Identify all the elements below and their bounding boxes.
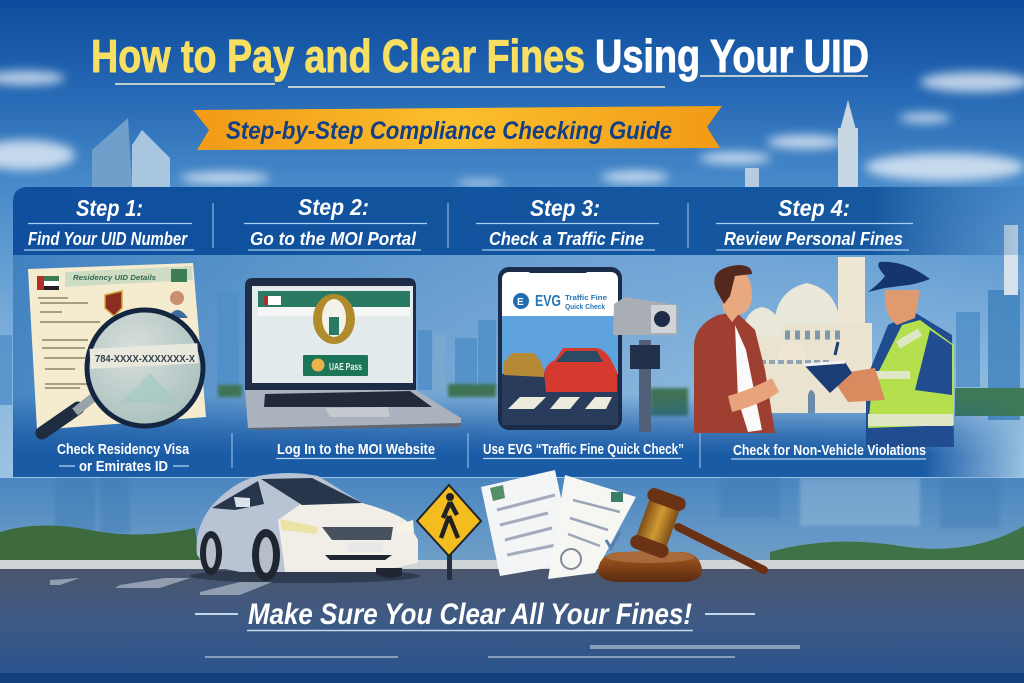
step 4 heading: Step 4: xyxy=(778,195,850,221)
step 3 caption: Use EVG “Traffic Fine Quick Check” xyxy=(483,441,684,458)
UAE Pass button xyxy=(303,355,368,376)
icon: magnifying glass xyxy=(42,310,203,433)
step 3 heading: Step 3: xyxy=(530,195,600,221)
step 2 heading: Go to the MOI Portal xyxy=(250,228,417,249)
step 1 heading xyxy=(24,195,194,250)
icon: magnifying glass: 784-XXXX-XXXXXXX-X xyxy=(95,353,195,365)
step 2 heading: Step 2: xyxy=(298,194,369,220)
step 4 heading xyxy=(716,195,913,250)
step 1 xyxy=(24,195,206,475)
icon: fine documents xyxy=(481,470,636,579)
step 1 caption xyxy=(57,441,190,475)
icon: traffic camera xyxy=(613,297,677,432)
icon: phone with EVG app: Traffic Fine xyxy=(565,293,607,302)
step 2 xyxy=(244,194,461,458)
step 1 heading: Find Your UID Number xyxy=(28,228,188,249)
step 3 xyxy=(476,195,684,458)
icon: phone with EVG app xyxy=(498,267,622,430)
icon: residency document xyxy=(28,263,206,430)
icon: phone with EVG app: Quick Check xyxy=(565,302,606,311)
icon: pedestrian crossing sign xyxy=(417,485,481,580)
subtitle ribbon xyxy=(193,106,722,150)
step 1 heading: Step 1: xyxy=(76,195,143,221)
header band xyxy=(13,187,1024,255)
step 4 caption: Check for Non-Vehicle Violations xyxy=(733,442,926,459)
icon: judge gavel xyxy=(598,486,764,582)
step 3 heading xyxy=(476,195,659,250)
icon: red car xyxy=(544,348,617,392)
icon: orange car xyxy=(504,353,544,377)
main steps panel xyxy=(0,187,1024,477)
title: Using Your UID xyxy=(595,30,869,82)
subtitle ribbon: Step-by-Step Compliance Checking Guide xyxy=(226,117,672,145)
step 4 heading: Review Personal Fines xyxy=(724,228,903,249)
icon: mosque xyxy=(742,257,872,413)
step 2 caption: Log In to the MOI Website xyxy=(277,441,435,458)
icon: police officer xyxy=(804,262,954,447)
step 3 heading: Check a Traffic Fine xyxy=(489,228,644,249)
icon: phone with EVG app: EVG xyxy=(535,293,561,310)
step 1 caption: or Emirates ID xyxy=(79,458,168,475)
icon: residency document: Residency UID Details xyxy=(73,275,156,282)
icon: man in red shirt xyxy=(694,265,779,433)
closing message: Make Sure You Clear All Your Fines! xyxy=(248,598,692,631)
icon: laptop with MOI portal xyxy=(245,278,461,430)
title: How to Pay and Clear Fines xyxy=(91,30,585,82)
step 4 xyxy=(694,195,954,459)
UAE Pass button: UAE Pass xyxy=(329,362,362,373)
icon: phone with EVG app: E xyxy=(517,297,524,308)
panel background xyxy=(13,187,1024,477)
lower caption band xyxy=(13,395,1024,477)
skyline inside panel xyxy=(0,225,1024,420)
road markings xyxy=(50,578,800,658)
step 1 caption: Check Residency Visa xyxy=(57,441,190,458)
icon: white car xyxy=(190,473,420,583)
step 2 heading xyxy=(244,194,427,250)
